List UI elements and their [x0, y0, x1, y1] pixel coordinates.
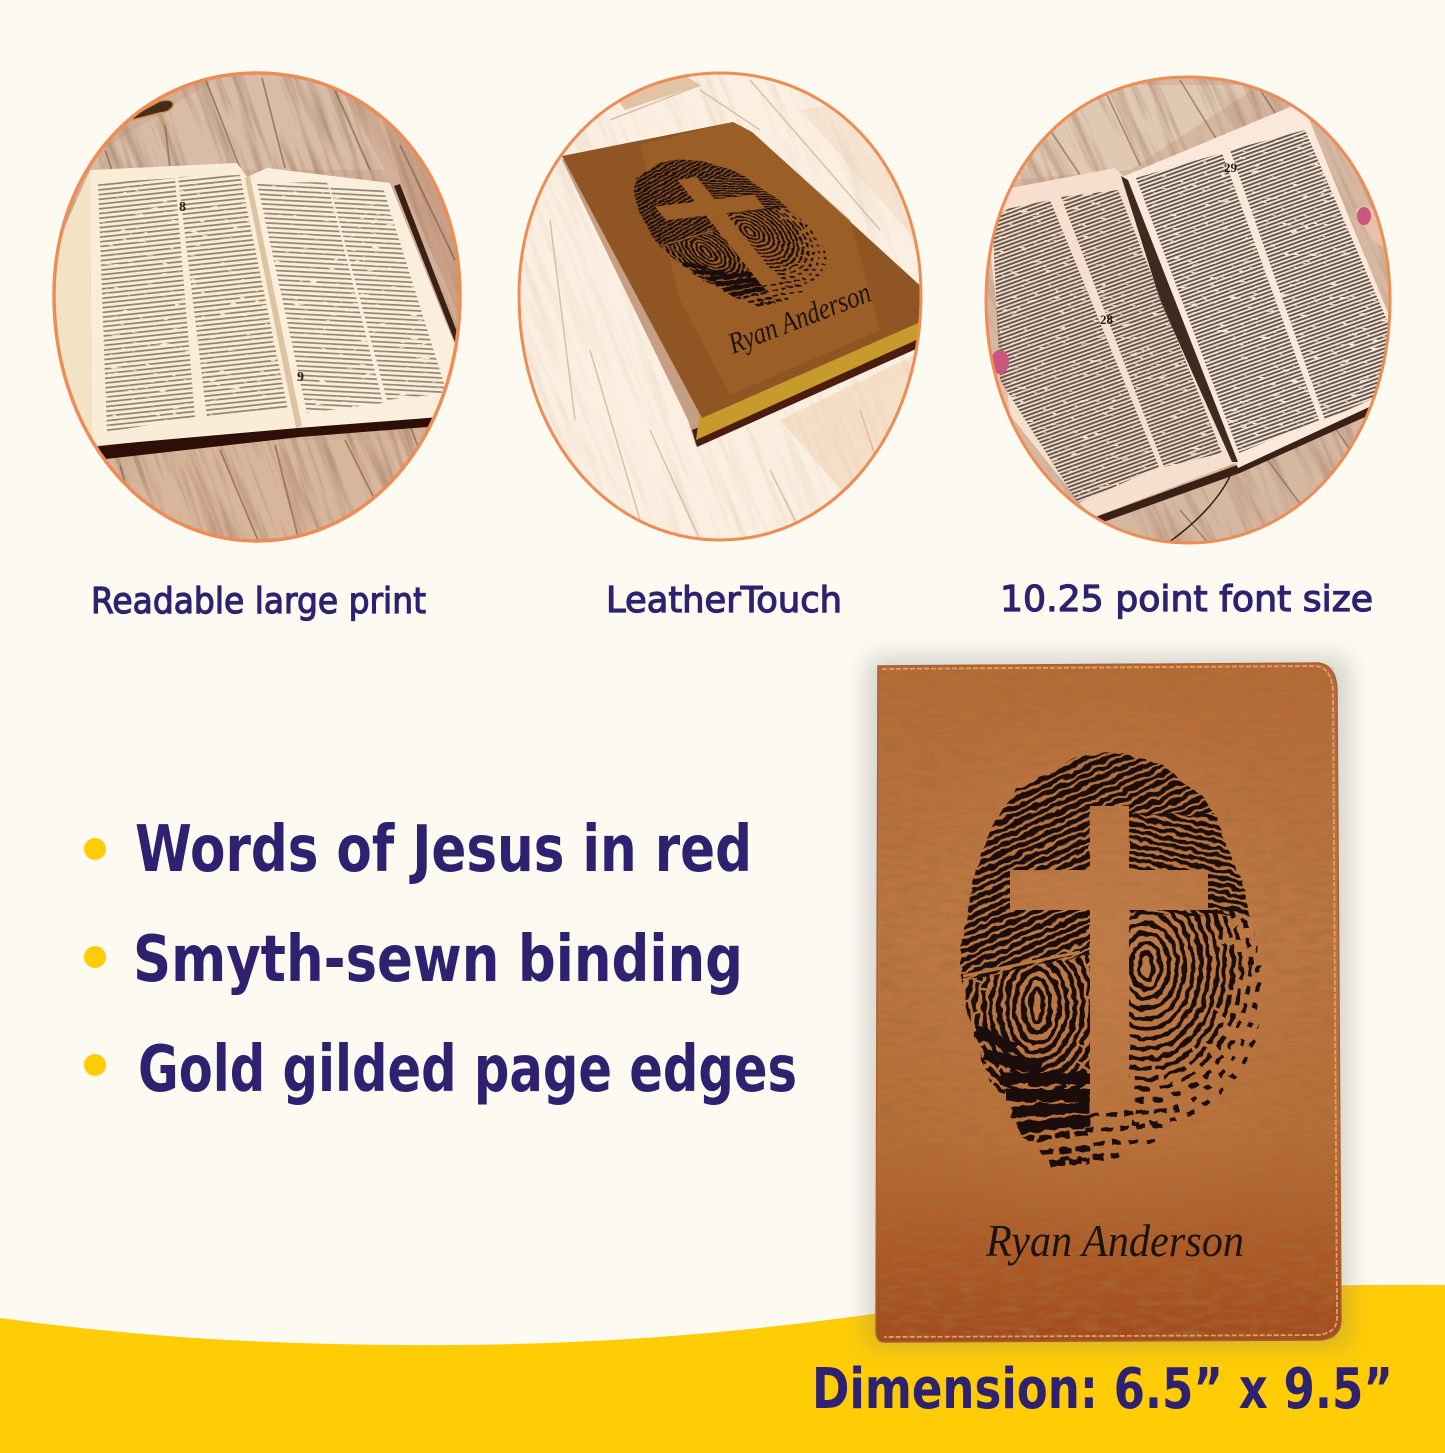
book shadow [92, 416, 440, 460]
right page text columns [257, 182, 383, 413]
bookmark ribbon [1170, 476, 1231, 541]
feature: words of Jesus: Words of Jesus in red [135, 813, 752, 887]
large leather Bible cover [866, 656, 1350, 1348]
photo: open Bible large print [52, 71, 462, 543]
caption: font size: 10.25 point font size [1000, 579, 1373, 620]
left page text columns [992, 200, 1159, 503]
gutter [1121, 176, 1238, 462]
spine [561, 158, 704, 446]
page block left [56, 170, 92, 437]
chapter number 28: 28 [1100, 312, 1114, 327]
pen [130, 100, 173, 120]
bullet 3 [84, 1054, 106, 1076]
yellow wave band [0, 1285, 1445, 1453]
caption: LeatherTouch: LeatherTouch [606, 580, 842, 621]
chapter number 8: 8 [179, 200, 186, 215]
fingerprint and cross [940, 730, 1280, 1164]
engraved name: Ryan Anderson [985, 1215, 1244, 1266]
right page [1122, 102, 1395, 468]
feature: Smyth-sewn binding: Smyth-sewn binding [133, 923, 743, 997]
right cover edge [394, 184, 456, 342]
cover shadow [866, 656, 1350, 1348]
left thumb nail [991, 350, 1009, 374]
fingerprint and cross [634, 159, 827, 307]
bullet 1 [84, 838, 106, 860]
left page text columns [98, 178, 195, 432]
feature list [84, 813, 797, 1107]
book bottom edge [1096, 407, 1369, 522]
page edge shadow [692, 340, 916, 447]
feature: gold gilded edges: Gold gilded page edges [138, 1033, 797, 1107]
right cover sliver [1340, 110, 1395, 290]
photo: LeatherTouch closed Bible [518, 72, 922, 542]
chapter number 29: 29 [1224, 160, 1238, 175]
cover [562, 122, 925, 418]
left finger skin [996, 373, 1016, 428]
right page text columns [1136, 153, 1319, 453]
stitching [882, 666, 1337, 1337]
photo: open Bible 10.25 point font [984, 76, 1392, 544]
left page [90, 163, 298, 446]
bullet 2 [84, 946, 106, 968]
gutter shade [245, 176, 302, 428]
right hand [1355, 206, 1384, 248]
gilded edge [696, 315, 925, 440]
chapter number 9: 9 [297, 370, 304, 385]
right page [247, 168, 456, 428]
cover [876, 663, 1341, 1342]
centre highlight [880, 700, 1330, 1300]
leather grain [880, 668, 1335, 1338]
name on cover: Ryan Anderson [723, 276, 876, 361]
caption: readable large print: Readable large print [91, 581, 426, 622]
left page [990, 168, 1238, 518]
